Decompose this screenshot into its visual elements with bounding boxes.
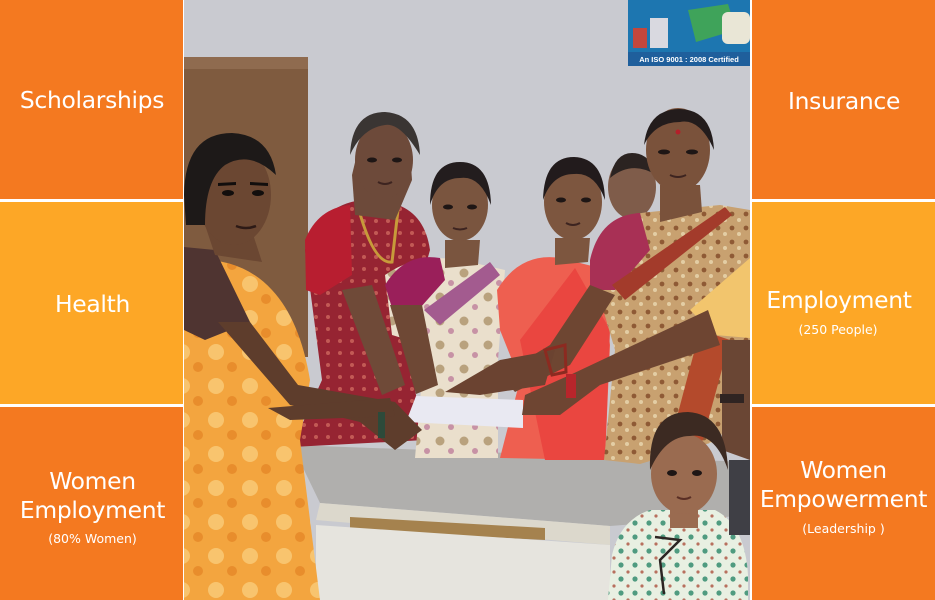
panel: Insurance [752,0,935,199]
wall [184,0,750,600]
envelope [406,396,523,428]
photo: women exchanging an envelope [184,0,750,600]
heading: Insurance: Insurance [788,87,900,115]
poster: An ISO 9001 : 2008 Certified [639,55,739,64]
panel: Women Empowerment [752,407,935,600]
heading: Women Empowerment: Empowerment [760,485,927,513]
woman in pink and white sari [385,162,505,458]
heading: Health: Health [55,290,130,318]
heading: Women Employment [20,467,165,524]
note: 80% Women: (80% Women) [48,531,137,546]
woman in beige sari [445,108,750,464]
right arm in yellow sleeve [522,258,750,460]
woman in orange sari [184,133,422,600]
heading: Scholarships: Scholarships [20,86,164,114]
note: 250 People: (250 People) [798,322,878,337]
heading: Women Employment: Employment [20,496,165,524]
heading: Women Employment: Women [49,467,136,495]
table [292,445,750,600]
note: Leadership: (Leadership ) [802,521,885,536]
panel: Employment [752,202,935,404]
woman in coral sari [497,153,656,460]
door [184,57,308,357]
panel: Health [0,202,183,404]
woman at back left [292,112,430,447]
heading: Employment: Employment [766,286,912,314]
poster [628,0,750,66]
panel: Women Employment [0,407,183,600]
heading: Women Empowerment: Women [800,456,887,484]
child [608,412,750,600]
panel: Scholarships [0,0,183,199]
heading: Women Empowerment [760,456,927,513]
